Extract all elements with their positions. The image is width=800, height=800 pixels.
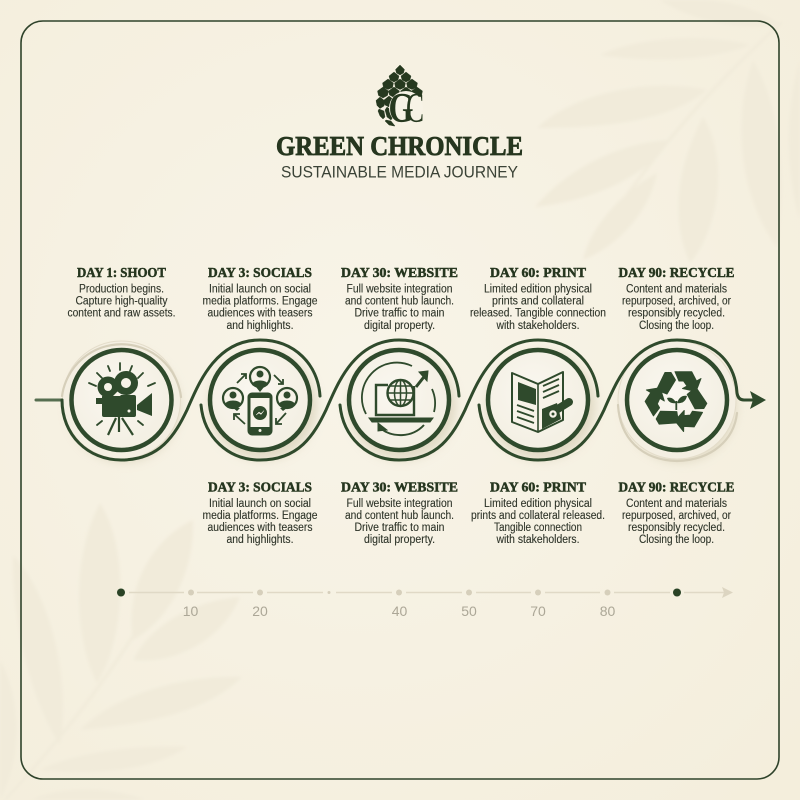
bottom text: Day 60 Print: Limited edition physical	[484, 498, 592, 510]
bottom text: Day 3 Socials: audiences with teasers	[208, 522, 313, 534]
top text: Day 3 Socials	[202, 266, 318, 332]
bottom text: Day 90 Recycle: responsibly recycled.	[628, 522, 725, 534]
top text: Day 1 Shoot: content and raw assets.	[68, 308, 176, 320]
bottom text: Day 3 Socials: media platforms. Engage	[202, 510, 318, 522]
bottom text: Day 30 Website: Drive traffic to main	[354, 522, 444, 534]
journey line arrowhead	[750, 391, 766, 409]
icon: open book with pen	[512, 372, 569, 432]
disk shadows	[68, 350, 736, 462]
decorative leaves: top right	[535, 0, 800, 263]
bottom text: Day 90 Recycle	[618, 480, 734, 546]
bottom text: Day 30 Website: digital property.	[364, 534, 435, 546]
timeline start and end dots	[117, 588, 681, 596]
top text: Day 90 Recycle: Content and materials	[626, 284, 727, 296]
timeline labels: 20	[252, 603, 268, 619]
icon: phone with audience bubbles	[223, 367, 297, 434]
bottom text: Day 30 Website: and content hub launch.	[345, 510, 454, 522]
decorative leaves: bottom left	[0, 503, 242, 800]
top text: Day 60 Print: released. Tangible connection	[470, 308, 606, 320]
bottom text: Day 90 Recycle: Closing the loop.	[639, 534, 714, 546]
icon: recycling arrows with sprout	[640, 372, 712, 435]
top text: Day 60 Print: DAY 60: PRINT	[490, 266, 587, 281]
flowing journey line	[36, 340, 756, 460]
top text: Day 1 Shoot: DAY 1: SHOOT	[77, 266, 167, 281]
bottom text: Day 30 Website: Full website integration	[346, 498, 452, 510]
timeline arrowhead	[722, 587, 733, 598]
bottom text: Day 3 Socials: DAY 3: SOCIALS	[208, 480, 312, 496]
top text: Day 90 Recycle: Closing the loop.	[639, 320, 714, 332]
bottom text: Day 3 Socials: Initial launch on social	[209, 498, 311, 510]
timeline labels: 40	[392, 603, 407, 619]
top text: Day 90 Recycle: repurposed, archived, or	[622, 296, 731, 308]
timeline labels	[183, 603, 615, 619]
logo: pine cone with GC monogram	[376, 65, 424, 132]
bottom text: Day 3 Socials: and highlights.	[226, 534, 294, 546]
top text: Day 30 Website: digital property.	[364, 320, 435, 332]
light arcs on first and last discs	[62, 344, 737, 461]
top text: Day 30 Website: Drive traffic to main	[354, 308, 444, 320]
monogram letter C: C	[406, 86, 424, 132]
bottom text: Day 90 Recycle: repurposed, archived, or	[622, 510, 731, 522]
top text: Day 60 Print: prints and collateral	[492, 296, 584, 308]
top text: Day 30 Website: and content hub launch.	[345, 296, 454, 308]
timeline labels: 50	[461, 603, 477, 619]
top text: Day 90 Recycle: responsibly recycled.	[628, 308, 725, 320]
top text: Day 1 Shoot	[68, 266, 176, 320]
timeline labels: 10	[183, 603, 198, 619]
monogram backing	[389, 91, 423, 125]
disc 4: print	[488, 350, 588, 450]
top text: Day 30 Website: Full website integration	[346, 284, 452, 296]
top text: Day 60 Print: Limited edition physical	[484, 284, 592, 296]
timeline tick dots	[188, 590, 610, 596]
bottom text: Day 90 Recycle: Content and materials	[626, 498, 727, 510]
top text: Day 3 Socials: audiences with teasers	[208, 308, 313, 320]
top text: Day 30 Website: DAY 30: WEBSITE	[341, 266, 458, 281]
bottom text: Day 60 Print	[471, 480, 605, 546]
icon: film camera	[89, 363, 155, 435]
top text: Day 3 Socials: and highlights.	[226, 320, 294, 332]
top text: Day 1 Shoot: Production begins.	[79, 284, 164, 296]
timeline axis	[117, 587, 733, 619]
top text: Day 3 Socials: DAY 3: SOCIALS	[208, 266, 312, 281]
bottom text: Day 30 Website	[341, 480, 458, 546]
disc 2: socials	[210, 350, 310, 450]
subtitle: SUSTAINABLE MEDIA JOURNEY	[281, 164, 518, 182]
timeline labels: 80	[600, 603, 615, 619]
top text: Day 3 Socials: Initial launch on social	[209, 284, 311, 296]
top text: Day 90 Recycle: DAY 90: RECYCLE	[618, 266, 734, 281]
top text: Day 3 Socials: media platforms. Engage	[202, 296, 318, 308]
bevel halos on first and last discs	[62, 341, 736, 459]
disc 5: recycle	[627, 350, 727, 450]
bottom text: Day 60 Print: prints and collateral released.	[471, 510, 605, 522]
title: GREEN CHRONICLE	[276, 131, 523, 161]
bottom text: Day 60 Print: with stakeholders.	[496, 534, 580, 546]
bottom text: Day 60 Print: Tangible connection	[494, 522, 582, 534]
disc 3: website	[349, 350, 449, 450]
top text: Day 60 Print	[470, 266, 606, 332]
disc 1: shoot	[72, 350, 172, 450]
bottom text: Day 90 Recycle: DAY 90: RECYCLE	[618, 480, 734, 496]
top text: Day 30 Website	[341, 266, 458, 332]
bottom text: Day 30 Website: DAY 30: WEBSITE	[341, 480, 458, 496]
top text: Day 90 Recycle	[618, 266, 734, 332]
bottom text: Day 3 Socials	[202, 480, 318, 546]
top text: Day 60 Print: with stakeholders.	[496, 320, 580, 332]
timeline labels: 70	[530, 603, 546, 619]
monogram letter G: G	[388, 86, 414, 132]
icon: laptop with globe	[362, 363, 435, 435]
bottom text: Day 60 Print: DAY 60: PRINT	[490, 480, 587, 496]
top text: Day 1 Shoot: Capture high-quality	[76, 296, 168, 308]
